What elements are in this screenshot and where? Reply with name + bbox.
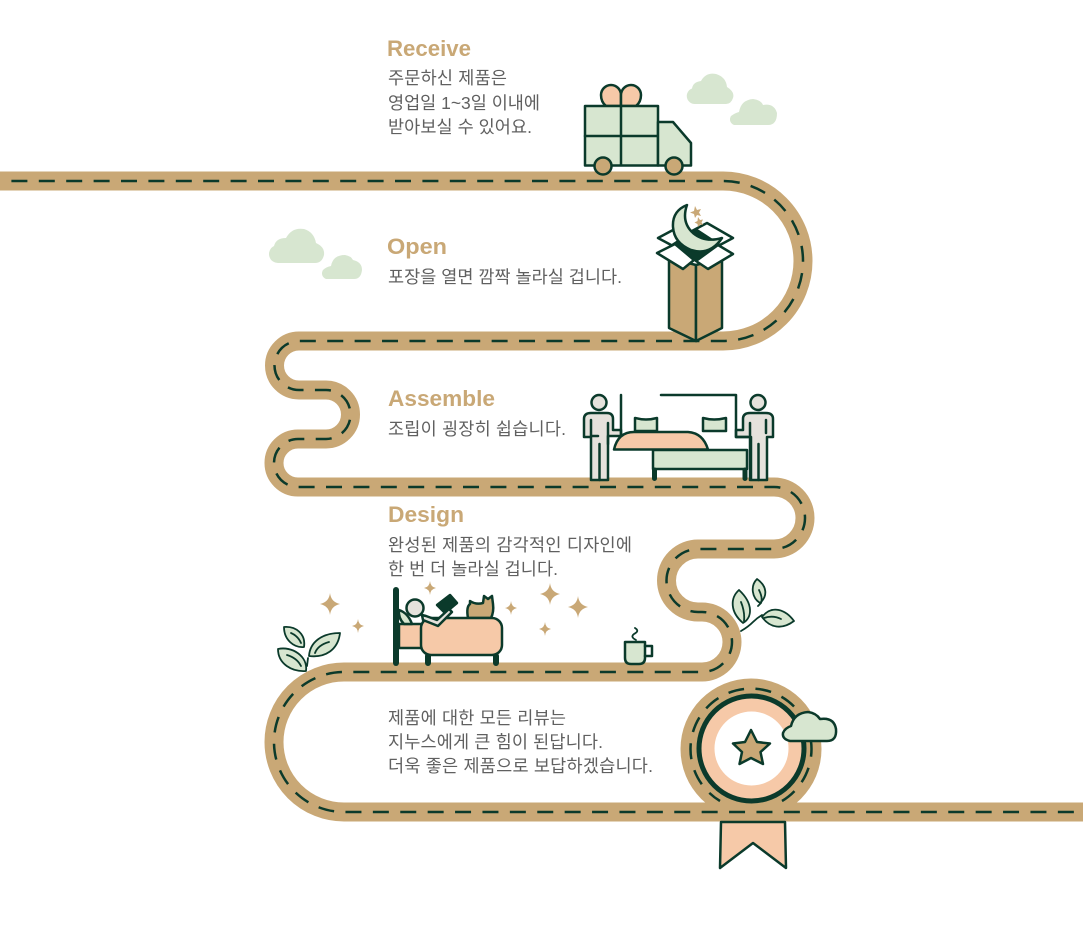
step 5: review text: 지누스에게 큰 힘이 된답니다. <box>388 732 603 752</box>
step 4: Design text: 완성된 제품의 감각적인 디자인에 <box>388 535 632 555</box>
step 2: Open text <box>387 234 622 287</box>
bed <box>614 418 747 478</box>
step 2: Open text: 포장을 열면 깜짝 놀라실 겁니다. <box>388 267 622 287</box>
step 1: Receive text: 주문하신 제품은 <box>388 68 507 88</box>
step 5: review text <box>388 708 653 776</box>
icon: gift delivery truck <box>585 85 691 174</box>
step 2: Open text: Open <box>387 234 447 259</box>
step 5: review text: 제품에 대한 모든 리뷰는 <box>388 708 566 728</box>
icon: medal badge <box>690 689 812 801</box>
icon: leaves right <box>733 579 794 631</box>
step 1: Receive text: 영업일 1~3일 이내에 <box>388 93 540 113</box>
left person <box>584 395 621 480</box>
step 4: Design text <box>388 502 632 579</box>
icon: clouds near truck <box>687 74 777 125</box>
icon: cloud on medal <box>783 712 836 741</box>
icon: leaves left <box>278 627 340 671</box>
icon: open box with moon <box>657 205 733 341</box>
icon: clouds near Open <box>269 229 362 279</box>
icon: reading in bed with cat <box>396 590 502 663</box>
step 4: Design text: 한 번 더 놀라실 겁니다. <box>388 559 558 579</box>
winding road <box>0 181 1083 820</box>
step 4: Design text: Design <box>388 502 464 527</box>
step 3: Assemble text: Assemble <box>388 386 495 411</box>
step 1: Receive text <box>387 36 540 137</box>
icon: sparkles <box>320 581 588 636</box>
step 3: Assemble text: 조립이 굉장히 쉽습니다. <box>388 419 566 439</box>
step 3: Assemble text <box>388 386 566 439</box>
icon: coffee cup <box>625 628 652 664</box>
icon: medal ribbon <box>720 822 786 868</box>
step 1: Receive text: Receive <box>387 36 471 61</box>
icon: two people assembling bed <box>584 395 773 480</box>
step 1: Receive text: 받아보실 수 있어요. <box>388 117 532 137</box>
right person <box>661 395 773 480</box>
step 5: review text: 더욱 좋은 제품으로 보답하겠습니다. <box>388 756 653 776</box>
